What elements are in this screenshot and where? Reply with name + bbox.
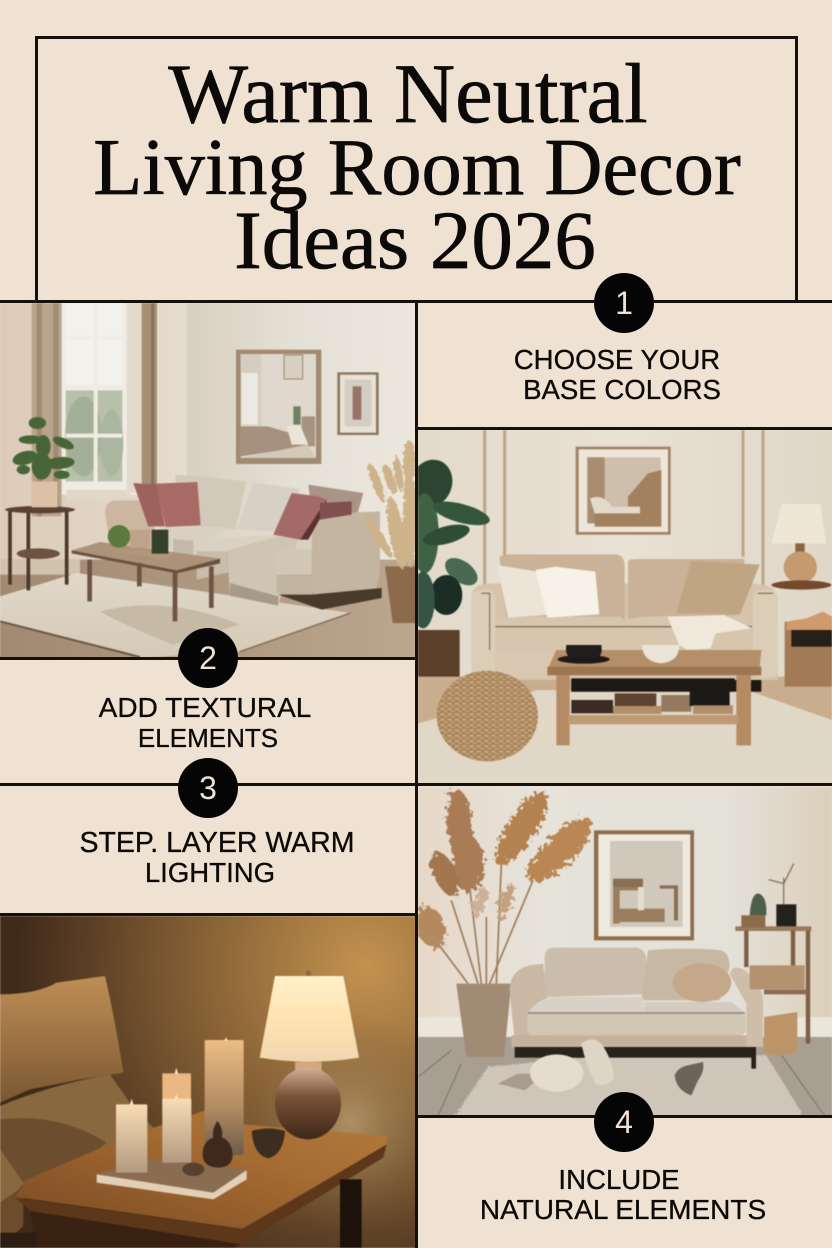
candles xyxy=(205,1040,244,1155)
framed art xyxy=(594,830,694,940)
title: Warm Neutral xyxy=(168,48,648,141)
step 2 number: 2 xyxy=(199,640,217,676)
title xyxy=(93,48,741,286)
small jar and bowl xyxy=(203,1121,233,1168)
woven pouf xyxy=(437,671,538,761)
sofa xyxy=(510,964,548,1040)
photo: lamp and candles xyxy=(0,916,415,1248)
step 4 label: INCLUDE xyxy=(558,1164,680,1195)
title: Living Room Decor xyxy=(93,123,741,212)
mirror xyxy=(236,350,321,464)
pillows xyxy=(0,976,123,1103)
coffee table xyxy=(72,542,220,570)
side shelf xyxy=(735,926,811,931)
step 3 label: STEP. LAYER WARM xyxy=(79,827,355,859)
lamp xyxy=(260,976,359,1062)
stones xyxy=(530,1054,583,1092)
step 3 label xyxy=(79,827,355,888)
step 4 label: NATURAL ELEMENTS xyxy=(480,1194,766,1225)
step 3 label: LIGHTING xyxy=(145,857,275,888)
step 2 label: ELEMENTS xyxy=(138,723,278,753)
step 3 number: 3 xyxy=(199,770,217,806)
step 3 number xyxy=(178,758,238,818)
step 1 label: CHOOSE YOUR xyxy=(514,344,720,375)
planter xyxy=(456,984,511,1057)
side table xyxy=(16,1104,387,1229)
step 4 label xyxy=(480,1164,766,1225)
sofa xyxy=(571,677,761,692)
photo: pampas grass room xyxy=(418,786,832,1115)
step 1 label: BASE COLORS xyxy=(523,374,721,405)
step 1 label xyxy=(514,344,721,405)
book xyxy=(97,1159,247,1193)
title: Ideas 2026 xyxy=(234,194,596,286)
step 1 number xyxy=(594,273,654,333)
photo: living room with window xyxy=(0,303,415,657)
side table and plant xyxy=(5,506,75,513)
plant xyxy=(404,454,492,628)
step 4 number: 4 xyxy=(615,1104,633,1140)
step 2 number xyxy=(178,628,238,688)
step 4 number xyxy=(594,1092,654,1152)
pampas plumes xyxy=(410,785,601,952)
coffee table xyxy=(548,650,761,668)
curtains xyxy=(32,303,62,516)
sofa xyxy=(105,500,162,550)
step 2 label xyxy=(98,692,311,753)
small framed print xyxy=(337,372,379,435)
pampas stems xyxy=(438,864,533,984)
lamp side table xyxy=(771,504,826,543)
rug xyxy=(0,573,351,658)
photo: sofa with coffee table xyxy=(418,430,832,783)
framed art xyxy=(576,447,671,535)
window xyxy=(60,303,140,495)
title box xyxy=(35,36,798,301)
floor xyxy=(418,677,832,784)
rug xyxy=(455,1055,801,1116)
step 2 label: ADD TEXTURAL xyxy=(99,692,311,723)
step 1 number: 1 xyxy=(615,285,633,321)
basket and pampas xyxy=(385,566,416,623)
